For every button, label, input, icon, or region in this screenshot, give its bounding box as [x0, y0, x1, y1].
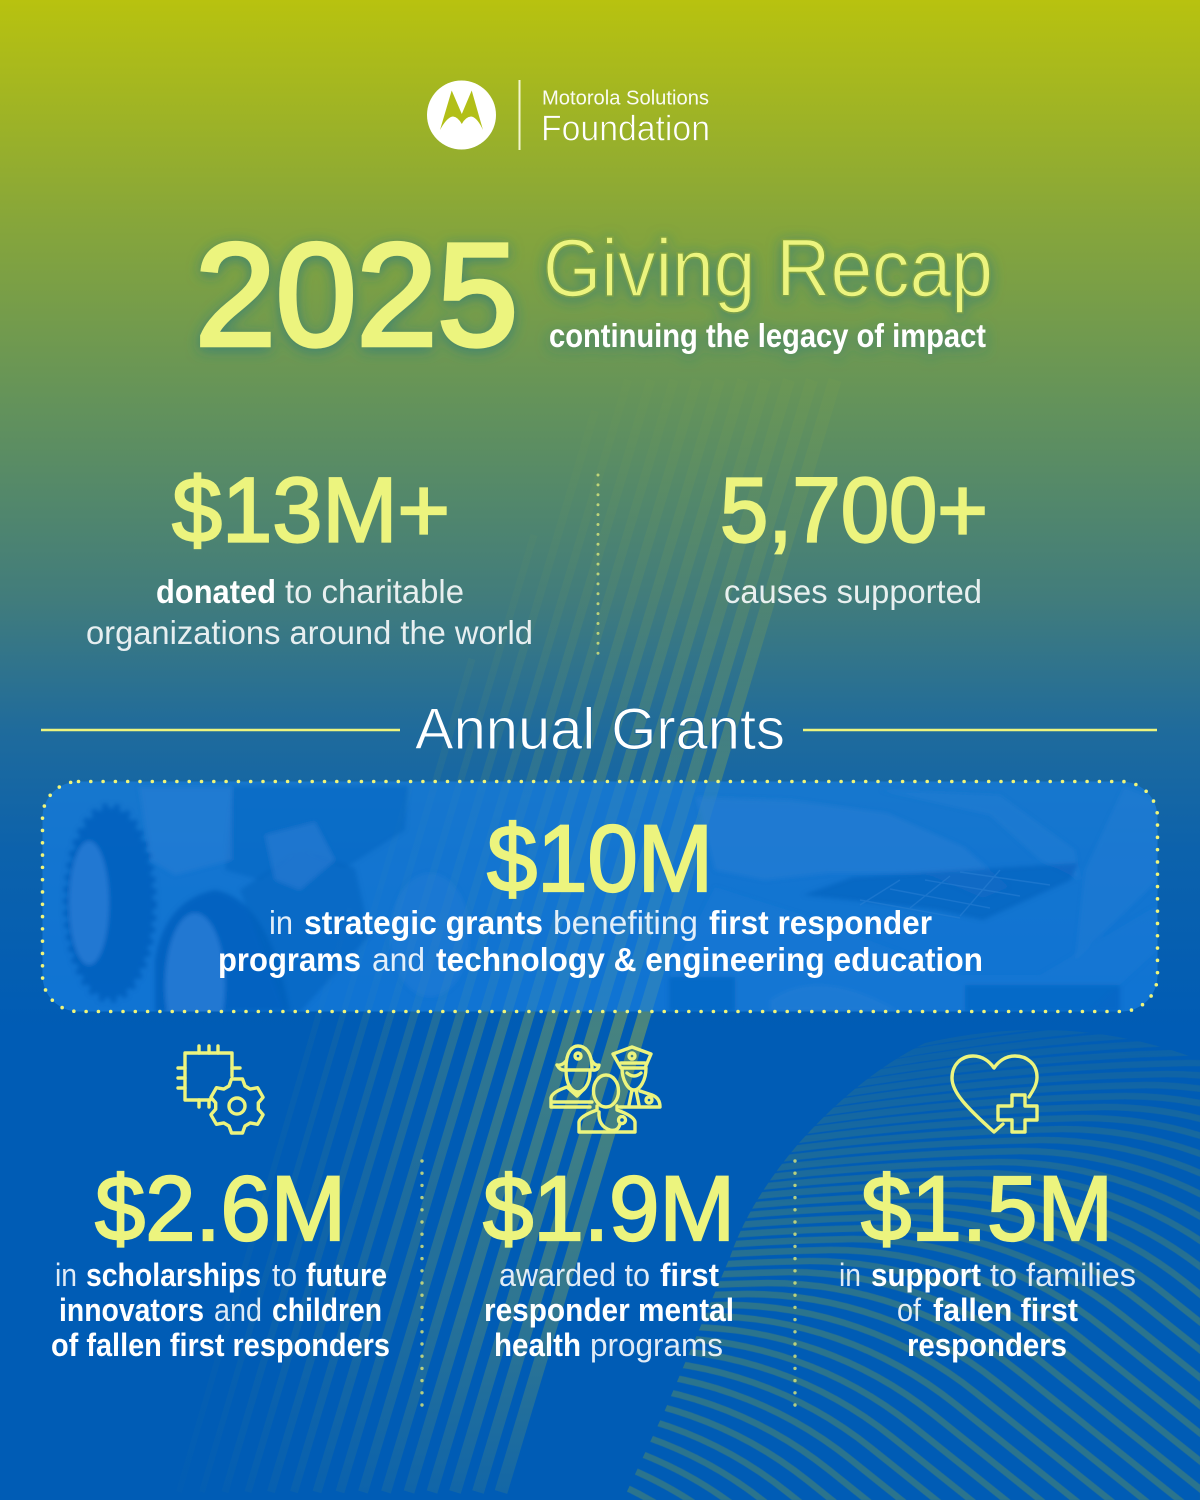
- stat: $1.5M family support: support: [871, 1257, 981, 1293]
- panel: $10M strategic grants: $10M: [487, 806, 713, 912]
- logo: Motorola Solutions Foundation: Foundation: [541, 108, 710, 148]
- stat: $1.9M mental health programs: programs: [590, 1327, 723, 1363]
- icon: first responders: [551, 1046, 660, 1132]
- panel: $10M strategic grants: and: [372, 941, 425, 978]
- stat: $1.5M family support: [839, 1158, 1136, 1363]
- panel photo background: [42, 782, 1158, 1012]
- stat: $13M+ donated: to charitable: [285, 573, 464, 610]
- stat: $1.9M mental health programs: $1.9M: [483, 1158, 735, 1260]
- stat: $1.5M family support: of: [897, 1292, 921, 1328]
- stat: 5,700+ causes supported: causes supported: [724, 573, 982, 610]
- stat: $1.9M mental health programs: first: [660, 1257, 719, 1293]
- stat: $13M+ donated: [86, 460, 533, 651]
- stat: $1.9M mental health programs: health: [494, 1327, 581, 1363]
- title: 2025 Giving Recap: continuing the legacy of impact: [549, 317, 986, 354]
- curved arc pattern: [623, 1030, 1200, 1500]
- stat: $1.5M family support: in: [839, 1257, 861, 1293]
- title: 2025 Giving Recap: [195, 213, 993, 376]
- stat: $2.6M scholarships: $2.6M: [95, 1158, 346, 1260]
- stat: $2.6M scholarships: children: [272, 1292, 382, 1328]
- panel: $10M strategic grants: in: [269, 904, 293, 941]
- title: 2025 Giving Recap: 2025: [195, 213, 518, 376]
- heading: Annual Grants: Annual Grants: [415, 697, 785, 762]
- stat: $1.9M mental health programs: [483, 1158, 735, 1363]
- icon: heart with cross: [952, 1056, 1037, 1132]
- dotted panel border: [42, 782, 1158, 1012]
- icon: Motorola M emblem: [427, 80, 496, 150]
- stat: 5,700+ causes supported: [720, 460, 988, 610]
- diagonal stripe pattern: [179, 380, 835, 1492]
- stat: $2.6M scholarships: innovators: [59, 1292, 204, 1328]
- stat: $2.6M scholarships: of fallen first responders: [51, 1327, 390, 1363]
- panel: $10M strategic grants: benefiting: [553, 904, 698, 941]
- stat: $13M+ donated: donated: [156, 573, 276, 610]
- stat: $13M+ donated: organizations around the world: [86, 614, 533, 651]
- logo: Motorola Solutions Foundation: [427, 80, 710, 150]
- stat: $13M+ donated: $13M+: [172, 460, 450, 562]
- icon: chip and gear: [178, 1046, 263, 1133]
- stat: $1.9M mental health programs: awarded to: [499, 1257, 650, 1293]
- stat: $2.6M scholarships: in: [55, 1257, 77, 1293]
- panel: $10M strategic grants: first responder: [709, 904, 932, 941]
- stat: 5,700+ causes supported: 5,700+: [720, 460, 988, 562]
- panel: $10M strategic grants: strategic grants: [304, 904, 543, 941]
- stat: $1.5M family support: responders: [907, 1327, 1067, 1363]
- panel: $10M strategic grants: [42, 781, 1158, 1057]
- stat: $1.5M family support: to families: [990, 1257, 1136, 1293]
- logo: Motorola Solutions Foundation: Motorola Solutions: [542, 88, 709, 110]
- stat: $1.9M mental health programs: responder mental: [484, 1292, 734, 1328]
- panel: $10M strategic grants: programs: [218, 941, 361, 978]
- panel: $10M strategic grants: technology & engineering education: [436, 941, 983, 978]
- stat: $1.5M family support: fallen first: [933, 1292, 1078, 1328]
- stat: $1.5M family support: $1.5M: [861, 1158, 1113, 1260]
- stat: $2.6M scholarships: future: [306, 1257, 387, 1293]
- title: 2025 Giving Recap: Giving Recap: [543, 223, 993, 314]
- stat: $2.6M scholarships: [51, 1158, 390, 1363]
- stat: $2.6M scholarships: scholarships: [86, 1257, 261, 1293]
- stat: $2.6M scholarships: to: [272, 1257, 297, 1293]
- stat: $2.6M scholarships: and: [214, 1292, 262, 1328]
